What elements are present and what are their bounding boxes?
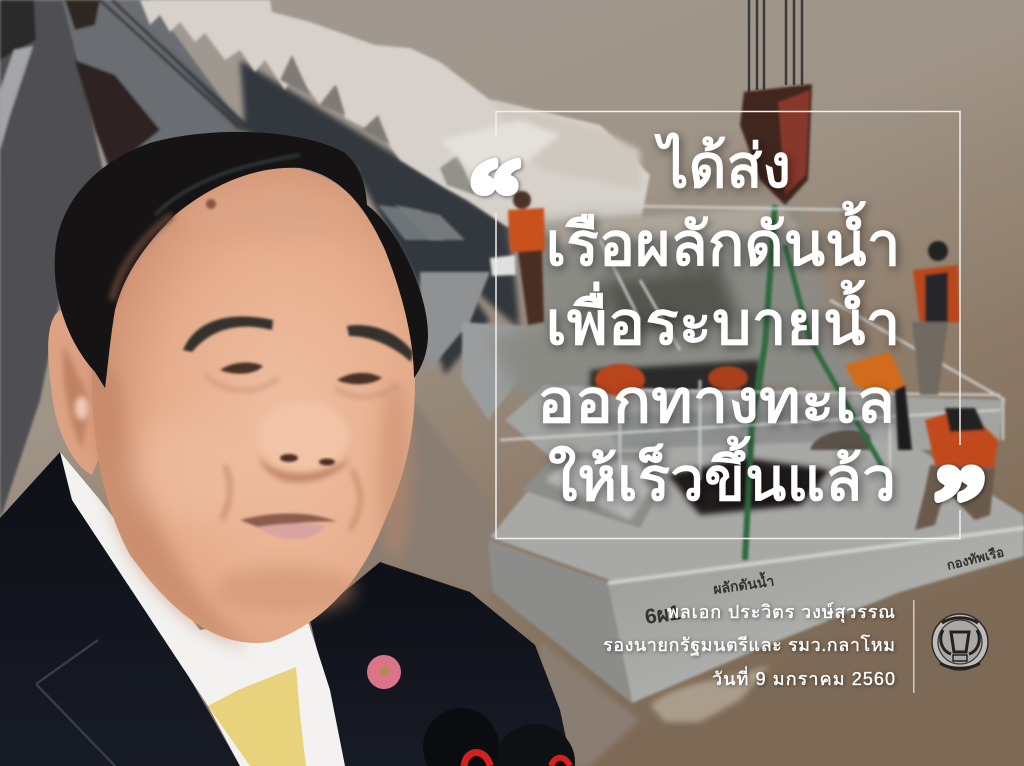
quote line 1: ได้ส่ง [655,132,791,200]
yellow tie [208,667,306,766]
dark suit [0,452,572,766]
face shading [90,187,411,648]
concrete wall at left [0,0,104,520]
main quote text [537,132,900,513]
portrait of the speaker [0,132,575,766]
quote line 3: เพื่อระบายน้ำ [546,280,900,357]
nose [222,402,360,530]
ear [48,310,115,475]
water foam at bow [650,665,770,722]
date: วันที่ 9 มกราคม 2560 [712,666,895,689]
quotation frame [496,112,960,538]
railway and shrubs between wall and tents [62,0,245,175]
face [92,164,415,643]
microphones [423,708,575,766]
suit lapel highlight [36,640,115,766]
boat rails [500,205,1005,500]
closing quotation mark: ” [934,445,986,560]
hair [55,132,428,388]
attribution block [603,602,895,689]
muddy river bank [370,340,640,766]
hair highlights [112,155,300,300]
mouth [240,514,337,539]
hull left facet [488,540,632,703]
eye bags [205,375,398,397]
hull markings [643,544,1005,629]
quote line 4: ออกทางทะเล [537,368,895,435]
hull bow facet [607,526,1024,703]
upper boat deck and rails region [490,210,900,400]
crane block and cables [740,0,890,560]
shadowed pontoons under tents [140,25,520,375]
main hull deck [490,440,1024,584]
speaker name: พลเอก ประวิตร วงษ์สุวรรณ [667,602,895,623]
grey slabs of moored boats [395,205,545,420]
quote line 2: เรือผลักดันน้ำ [546,201,900,278]
divider beside attribution [913,600,914,693]
eyebrows [183,317,413,362]
white shirt collar [60,452,345,766]
crew member top left [490,191,545,325]
crew bending foreground [915,408,998,530]
speaker position: รองนายกรัฐมนตรีและ รมว.กลาโหม [603,634,895,656]
eyes [220,363,382,384]
middle boat [505,385,1003,470]
hull markings: ผลักดันน้ำ [712,570,775,597]
quote line 5: ให้เร็วขึ้นแล้ว [548,436,896,513]
opening quotation mark: “ [469,138,521,253]
lapel pin [367,655,401,689]
hull markings: 6ผ1 [643,601,682,629]
crew crouching [595,352,912,450]
hull markings: กองทัพเรือ [945,544,1005,573]
crew in orange life vests [490,191,998,530]
crew member standing right [912,241,960,395]
government seal icon [932,614,988,670]
white tent roofs [140,0,650,227]
